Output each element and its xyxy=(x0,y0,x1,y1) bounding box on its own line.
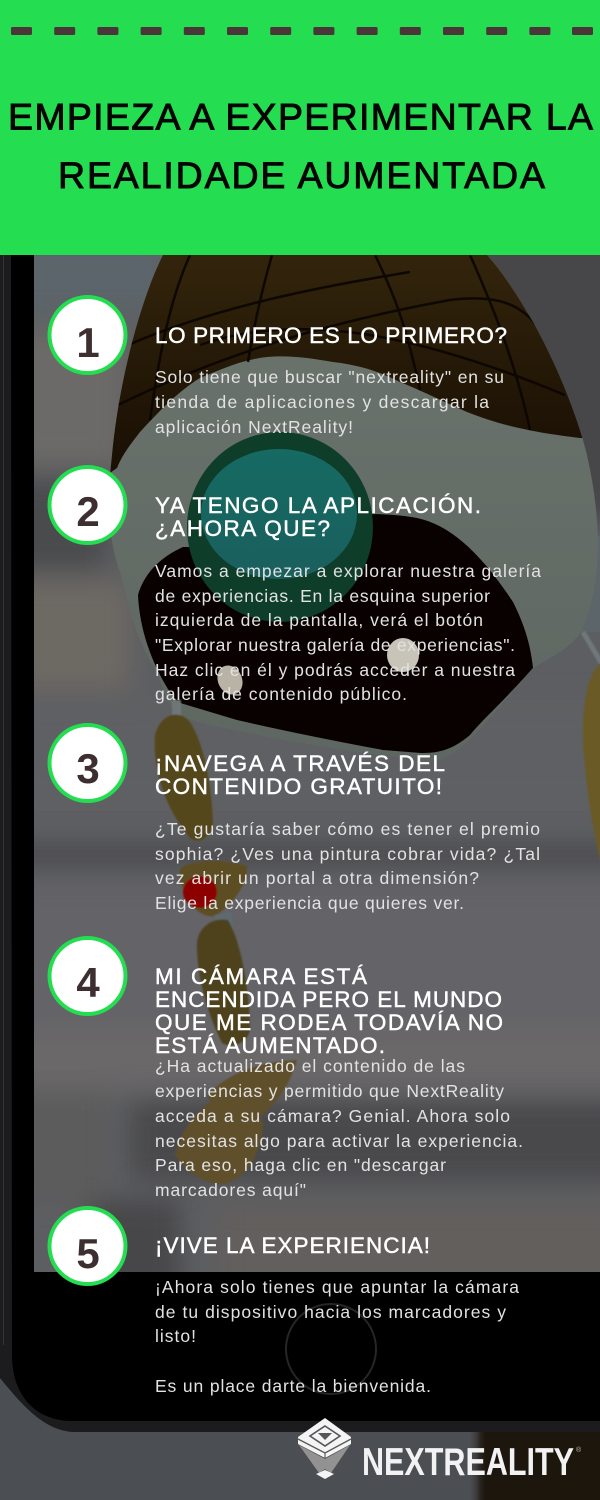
right limb xyxy=(583,632,600,868)
title: REALIDADE AUMENTADA xyxy=(58,154,545,196)
number badge 3 xyxy=(50,725,126,801)
step 4 body: ¿Ha actualizado el contenido de las xyxy=(155,1056,465,1076)
step 5 body: Es un place darte la bienvenida. xyxy=(155,1376,431,1396)
step 4 body: acceda a su cámara? Genial. Ahora solo xyxy=(155,1106,510,1126)
number badge 4: 4 xyxy=(76,959,100,1006)
step 3 body xyxy=(155,819,540,913)
blurred room backdrop xyxy=(34,255,600,1272)
step 3 xyxy=(50,725,540,913)
step 2 body: izquierda de la pantalla, verá el botón xyxy=(155,610,483,630)
number badge 5 xyxy=(50,1208,126,1284)
step 5 body: de tu dispositivo hacia los marcadores y xyxy=(155,1302,506,1322)
step 2 body: Haz clic en él y podrás acceder a nuestra xyxy=(155,660,515,680)
step 2 xyxy=(50,467,541,704)
number badge 1: 1 xyxy=(76,319,100,366)
icon: cube logo xyxy=(298,1418,351,1479)
NextReality logo xyxy=(298,1418,582,1484)
number badge 3: 3 xyxy=(76,745,100,792)
step 2 heading: ¿AHORA QUE? xyxy=(155,516,330,541)
step 4 body: marcadores aquí" xyxy=(155,1180,306,1200)
dashed stitching row xyxy=(11,27,593,35)
step 4 body: Para eso, haga clic en "descargar xyxy=(155,1155,446,1175)
title xyxy=(8,96,593,196)
step 2 body: "Explorar nuestra galería de experiencias". xyxy=(155,635,515,655)
step 2 heading: YA TENGO LA APLICACIÓN. xyxy=(155,493,481,518)
step 4 body: necesitas algo para activar la experiencia. xyxy=(155,1131,523,1151)
step 5 body: listo! xyxy=(155,1326,196,1346)
step 4 heading xyxy=(155,964,503,1058)
step 5 heading: ¡VIVE LA EXPERIENCIA! xyxy=(155,1233,430,1258)
step 4 heading: ESTÁ AUMENTADO. xyxy=(155,1033,385,1058)
step 1 body xyxy=(155,367,504,437)
step 2 body: de experiencias. En la esquina superior xyxy=(155,586,490,606)
header band xyxy=(0,0,600,255)
phone screen with blurred 3D character xyxy=(34,255,600,1272)
number badge 2: 2 xyxy=(76,488,100,535)
step 2 heading xyxy=(155,493,481,541)
step 1 heading: LO PRIMERO ES LO PRIMERO? xyxy=(155,323,507,348)
title: EMPIEZA A EXPERIMENTAR LA xyxy=(8,96,593,138)
step 4 xyxy=(50,938,523,1200)
step 5 body xyxy=(155,1277,519,1396)
step 2 body: Vamos a empezar a explorar nuestra galería xyxy=(155,561,541,581)
step 3 body: vez abrir un portal a otra dimensión? xyxy=(155,868,479,888)
step 2 body: galería de contenido público. xyxy=(155,684,407,704)
step 3 heading: CONTENIDO GRATUITO! xyxy=(155,774,442,799)
step 3 body: Elige la experiencia que quieres ver. xyxy=(155,893,464,913)
step 1 body: Solo tiene que buscar "nextreality" en su xyxy=(155,367,504,387)
step 4 heading: ENCENDIDA PERO EL MUNDO xyxy=(155,987,502,1012)
step 3 heading: ¡NAVEGA A TRAVÉS DEL xyxy=(155,751,445,776)
step 3 body: sophia? ¿Ves una pintura cobrar vida? ¿Tal xyxy=(155,844,540,864)
step 3 body: ¿Te gustaría saber cómo es tener el premio xyxy=(155,819,540,839)
home button ring xyxy=(286,1304,376,1394)
number badge 4 xyxy=(50,938,126,1014)
character leg and foot xyxy=(155,700,297,1184)
step 5 body: ¡Ahora solo tienes que apuntar la cámara xyxy=(155,1277,519,1297)
step 4 heading: QUE ME RODEA TODAVÍA NO xyxy=(155,1010,503,1035)
number badge 5: 5 xyxy=(76,1230,100,1277)
number badge 1 xyxy=(50,297,126,373)
step 4 body xyxy=(155,1056,523,1200)
character head xyxy=(100,255,600,775)
number badge 2 xyxy=(50,467,126,543)
step 3 heading xyxy=(155,751,445,799)
step 1 body: aplicación NextReality! xyxy=(155,417,353,437)
step 4 heading: MI CÁMARA ESTÁ xyxy=(155,964,367,989)
step 2 body xyxy=(155,561,541,704)
step 5 xyxy=(50,1208,519,1396)
phone body: bezel and lower chin xyxy=(0,255,600,1432)
step 1 xyxy=(50,297,507,437)
registered mark: ® xyxy=(576,1446,582,1454)
character shoulder joint xyxy=(581,536,600,632)
step 4 body: experiencias y permitido que NextReality xyxy=(155,1081,504,1101)
step 1 body: tienda de aplicaciones y descargar la xyxy=(155,392,489,412)
